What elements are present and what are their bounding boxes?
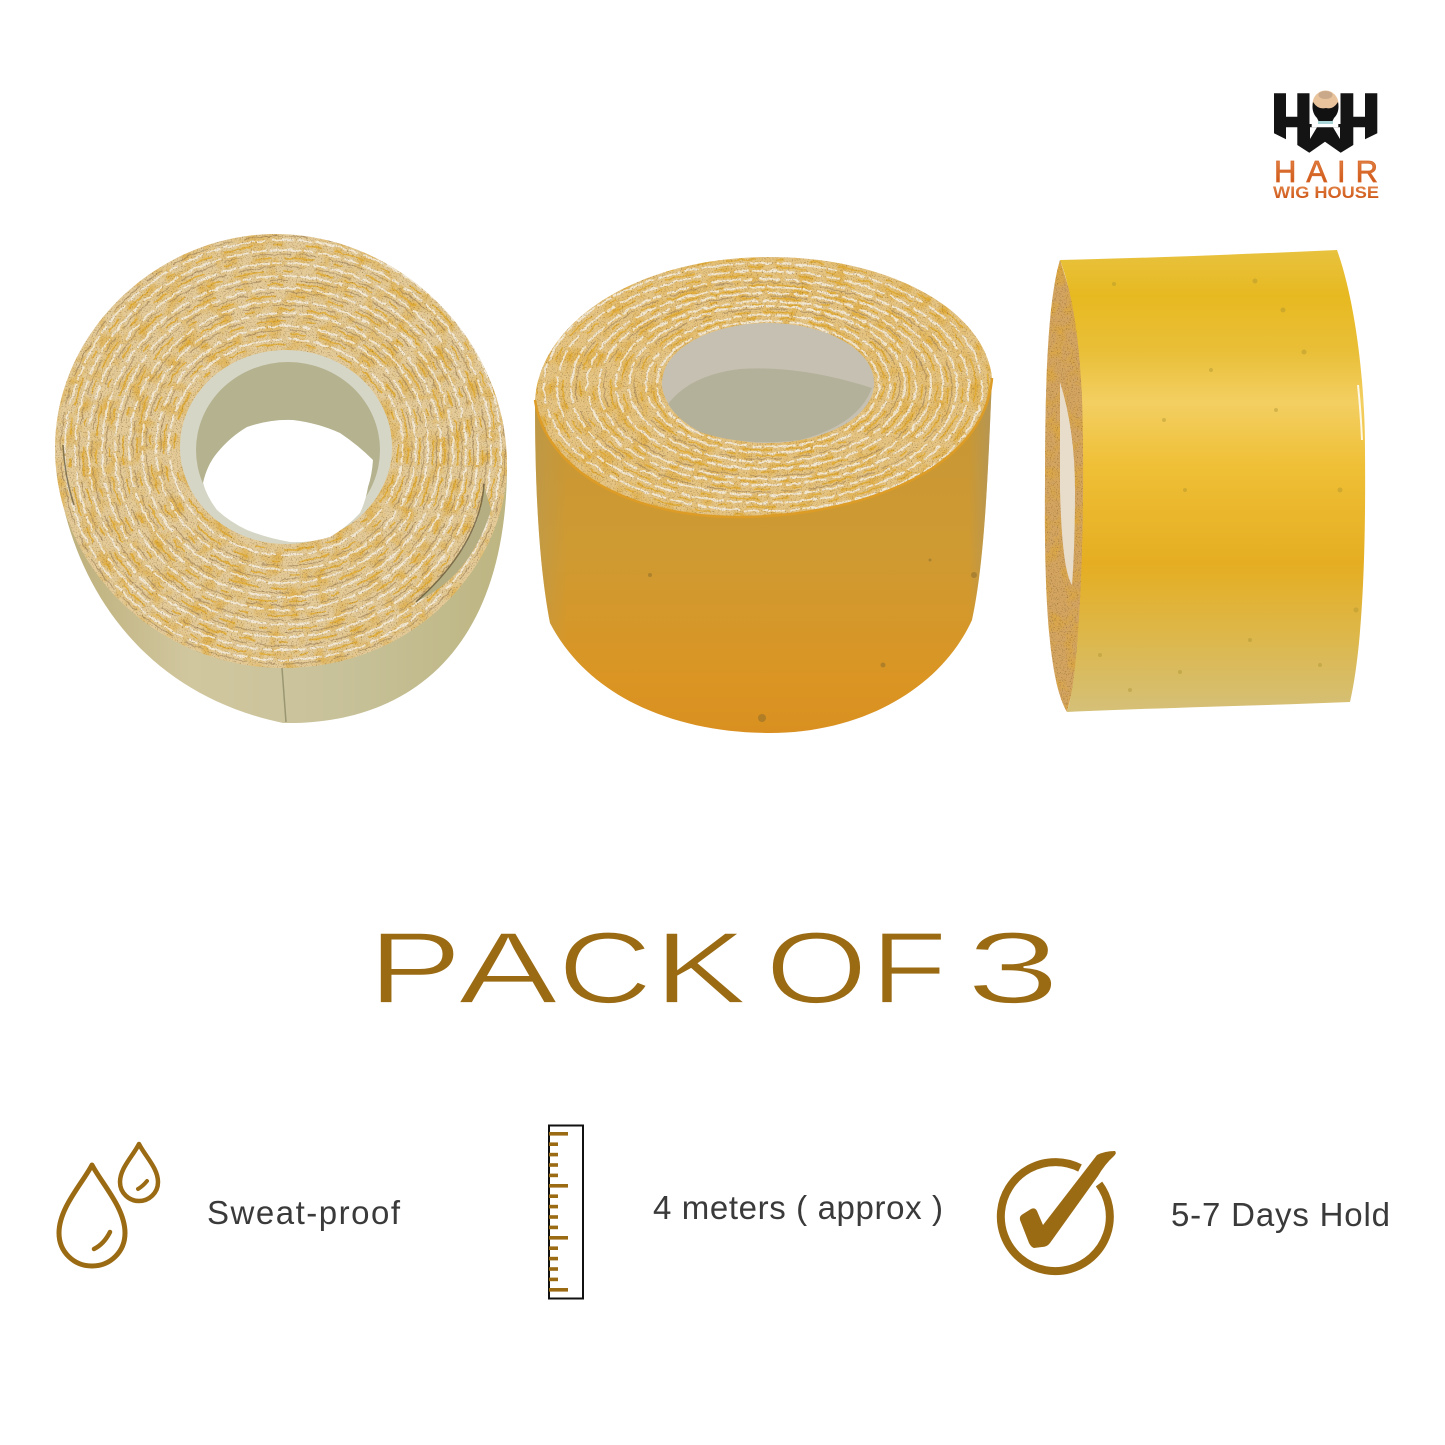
heading: PACK OF 3: F: [871, 911, 947, 1025]
tape 3 side edge: [1044, 260, 1084, 712]
tape 1 opening: [203, 420, 373, 542]
ruler frame: [549, 1126, 583, 1298]
heading: PACK OF 3: [368, 911, 1060, 1025]
label: 4 meters: 4 meters ( approx ): [653, 1189, 943, 1226]
tape 3 core slit: [1060, 382, 1075, 585]
head crown: [1318, 91, 1332, 99]
head skin: [1312, 90, 1338, 118]
tape 2 outer band: [535, 378, 992, 733]
tape 1 inner layer wedge: [415, 485, 491, 602]
icon: check in circle: [1001, 1151, 1116, 1271]
tape 2 face rim: [535, 378, 992, 517]
check circle ring: [1001, 1162, 1110, 1271]
hair: [1312, 102, 1338, 122]
heading: PACK OF 3: K: [654, 911, 747, 1025]
infographic canvas: [55, 90, 1388, 1300]
tape 3 spots: [1098, 278, 1358, 692]
check mark: [1020, 1151, 1116, 1248]
collar: [1318, 121, 1333, 124]
heading: PACK OF 3: 3: [966, 911, 1060, 1025]
tape 3 yellow face: [1060, 250, 1365, 712]
tape 2 spots: [648, 558, 977, 722]
tape 2 core floor: [668, 368, 872, 442]
ruler ticks: [549, 1132, 568, 1292]
feature: length: [549, 1126, 943, 1298]
icon: water drops: [59, 1144, 158, 1266]
tape 1 top face rings: [50, 228, 512, 673]
logo text WIG HOUSE: WIG HOUSE: [1273, 183, 1379, 202]
label: sweat-proof: Sweat-proof: [207, 1194, 401, 1231]
heading: PACK OF 3: A: [458, 911, 558, 1025]
tape 3 gloss highlight: [1358, 385, 1362, 440]
icon: ruler: [549, 1126, 583, 1298]
logo text HAIR: HAIR: [1274, 154, 1378, 189]
logo head: [1310, 90, 1340, 124]
tape roll 1: rolled tape seen from above: [50, 228, 512, 723]
feature: hold duration: [1001, 1151, 1390, 1271]
tape roll 3: side view yellow roll: [1040, 250, 1365, 715]
tape 2 top face rings: [530, 250, 1000, 525]
head white surround: [1310, 91, 1340, 124]
tape 1 outer band: [55, 450, 507, 723]
label: 5-7 days hold: 5-7 Days Hold: [1171, 1196, 1390, 1233]
tape 2 core: [662, 323, 874, 443]
tape 1 layer gap left: [63, 445, 74, 505]
logo HWH mark: [1274, 93, 1377, 153]
tape 1 layer gap right: [416, 484, 484, 602]
feature: sweat-proof: [59, 1144, 401, 1266]
heading: PACK OF 3: O: [766, 911, 868, 1025]
tape 1 seam: [282, 668, 286, 722]
logo: Hair Wig House: [1273, 90, 1379, 202]
tape 2 band edge shading: [535, 378, 992, 733]
logo W notches: [1310, 127, 1340, 139]
tape roll 2: standing roll with orange band: [530, 250, 1000, 733]
tape 1 core wall: [180, 350, 392, 544]
heading: PACK OF 3: C: [558, 911, 652, 1025]
heading: PACK OF 3: P: [368, 911, 462, 1025]
tape 1 core inner: [196, 362, 380, 538]
